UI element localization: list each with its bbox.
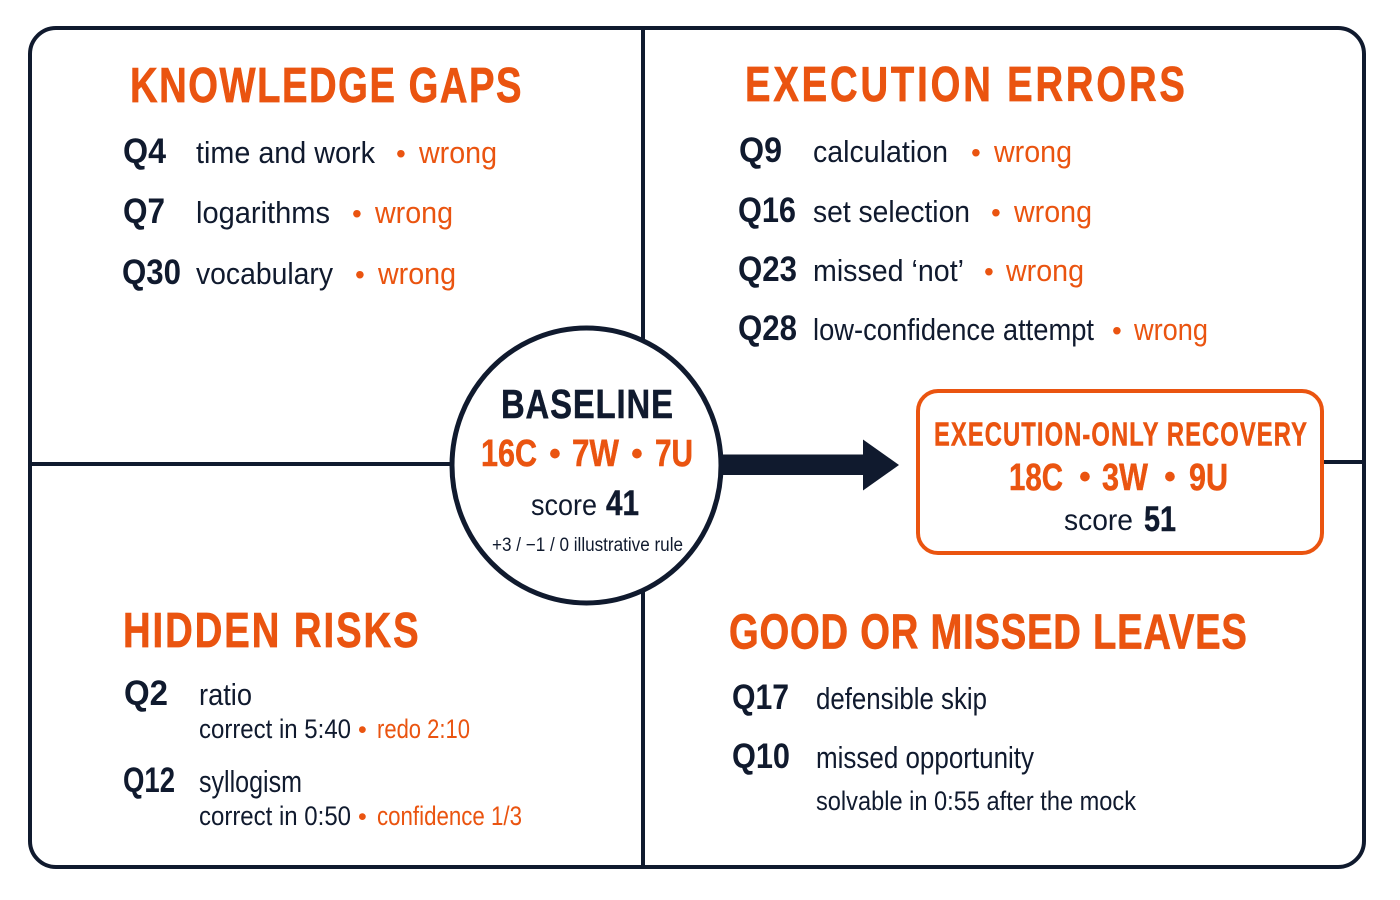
baseline score: 41 bbox=[606, 484, 639, 523]
row: Q12: syllogism bbox=[199, 764, 302, 799]
row: Q2: correct in 5:40 bbox=[199, 714, 351, 744]
recovery counts: • bbox=[1079, 458, 1091, 496]
row: Q10: missed opportunity bbox=[816, 740, 1034, 775]
row: Q23: • bbox=[984, 256, 994, 287]
baseline score bbox=[531, 484, 639, 523]
row: Q9: Q9 bbox=[739, 131, 782, 170]
row: Q9: • bbox=[971, 137, 981, 168]
row: Q23: Q23 bbox=[738, 250, 797, 289]
row: Q30: Q30 bbox=[122, 253, 181, 292]
row: Q30 bbox=[122, 253, 456, 292]
row: Q16: Q16 bbox=[738, 191, 796, 230]
row: Q4: wrong bbox=[418, 135, 497, 170]
row: Q16 bbox=[738, 191, 1092, 230]
baseline counts: • bbox=[631, 435, 643, 473]
recovery score: score bbox=[1064, 504, 1133, 537]
recovery title: EXECUTION-ONLY RECOVERY bbox=[934, 417, 1307, 454]
recovery counts bbox=[1009, 457, 1228, 499]
row: Q2: Q2 bbox=[124, 674, 168, 713]
row: Q12: correct in 0:50 bbox=[199, 801, 351, 831]
row: Q17 bbox=[732, 678, 987, 717]
row: Q4: Q4 bbox=[123, 132, 166, 171]
baseline score: score bbox=[531, 489, 597, 522]
panel: good or missed leaves bbox=[729, 605, 1247, 816]
heading: execution errors: EXECUTION ERRORS bbox=[745, 58, 1185, 112]
row: Q9: wrong bbox=[993, 134, 1072, 169]
recovery score bbox=[1064, 500, 1176, 539]
baseline circle bbox=[452, 328, 721, 603]
row: Q7: • bbox=[352, 198, 362, 229]
baseline counts: 7W bbox=[572, 433, 619, 475]
row: Q12: Q12 bbox=[123, 761, 175, 800]
baseline title: BASELINE bbox=[501, 380, 673, 427]
row: Q7: logarithms bbox=[196, 195, 330, 230]
baseline counts: 16C bbox=[481, 433, 537, 475]
recovery counts: 18C bbox=[1009, 457, 1063, 499]
row: Q16: • bbox=[991, 197, 1001, 228]
row: Q4 bbox=[123, 132, 497, 171]
row: Q28: Q28 bbox=[738, 309, 797, 348]
row: Q7: Q7 bbox=[123, 192, 165, 231]
row: Q9: calculation bbox=[813, 134, 948, 169]
row: Q30: wrong bbox=[377, 256, 456, 291]
baseline counts bbox=[481, 433, 693, 475]
row: Q7 bbox=[123, 192, 453, 231]
callout: execution-only recovery bbox=[918, 391, 1322, 553]
recovery score: 51 bbox=[1144, 500, 1176, 539]
row: Q12 bbox=[123, 761, 522, 831]
row: Q16: wrong bbox=[1013, 194, 1092, 229]
panel: execution errors bbox=[738, 58, 1208, 348]
row: Q17: Q17 bbox=[732, 678, 789, 717]
row: Q23: missed ‘not’ bbox=[813, 253, 964, 288]
row: Q7: wrong bbox=[374, 195, 453, 230]
panel: knowledge gaps bbox=[122, 59, 522, 292]
recovery counts: 3W bbox=[1102, 457, 1148, 499]
row: Q10: solvable in 0:55 after the mock bbox=[816, 786, 1137, 816]
row: Q4: • bbox=[396, 138, 406, 169]
recovery counts: 9U bbox=[1189, 457, 1228, 499]
row: Q28: wrong bbox=[1133, 312, 1208, 347]
recovery counts: • bbox=[1164, 458, 1176, 496]
row: Q10 bbox=[732, 737, 1137, 816]
row: Q30: • bbox=[355, 259, 365, 290]
row: Q16: set selection bbox=[813, 194, 970, 229]
row: Q12: • bbox=[358, 803, 367, 831]
row: Q2 bbox=[124, 674, 470, 744]
row: Q30: vocabulary bbox=[196, 256, 333, 291]
row: Q23 bbox=[738, 250, 1084, 289]
row: Q2: redo 2:10 bbox=[377, 714, 470, 744]
row: Q2: • bbox=[358, 716, 367, 744]
heading: good or missed leaves: GOOD OR MISSED LEAVES bbox=[729, 605, 1247, 660]
panel: hidden risks bbox=[123, 604, 522, 831]
baseline counts: • bbox=[549, 435, 561, 473]
heading: knowledge gaps: KNOWLEDGE GAPS bbox=[130, 59, 522, 113]
row: Q28: • bbox=[1112, 315, 1122, 346]
arrow: baseline to recovery bbox=[722, 440, 899, 490]
row: Q10: Q10 bbox=[732, 737, 790, 776]
row: Q9 bbox=[739, 131, 1072, 170]
row: Q12: confidence 1/3 bbox=[377, 801, 522, 831]
row: Q2: ratio bbox=[199, 677, 252, 712]
heading: hidden risks: HIDDEN RISKS bbox=[123, 604, 419, 658]
row: Q23: wrong bbox=[1005, 253, 1084, 288]
row: Q28 bbox=[738, 309, 1208, 348]
row: Q28: low-confidence attempt bbox=[813, 312, 1094, 347]
scoring rule note: +3 / −1 / 0 illustrative rule bbox=[492, 535, 683, 556]
row: Q17: defensible skip bbox=[816, 681, 987, 716]
baseline counts: 7U bbox=[655, 433, 693, 475]
row: Q4: time and work bbox=[196, 135, 375, 170]
